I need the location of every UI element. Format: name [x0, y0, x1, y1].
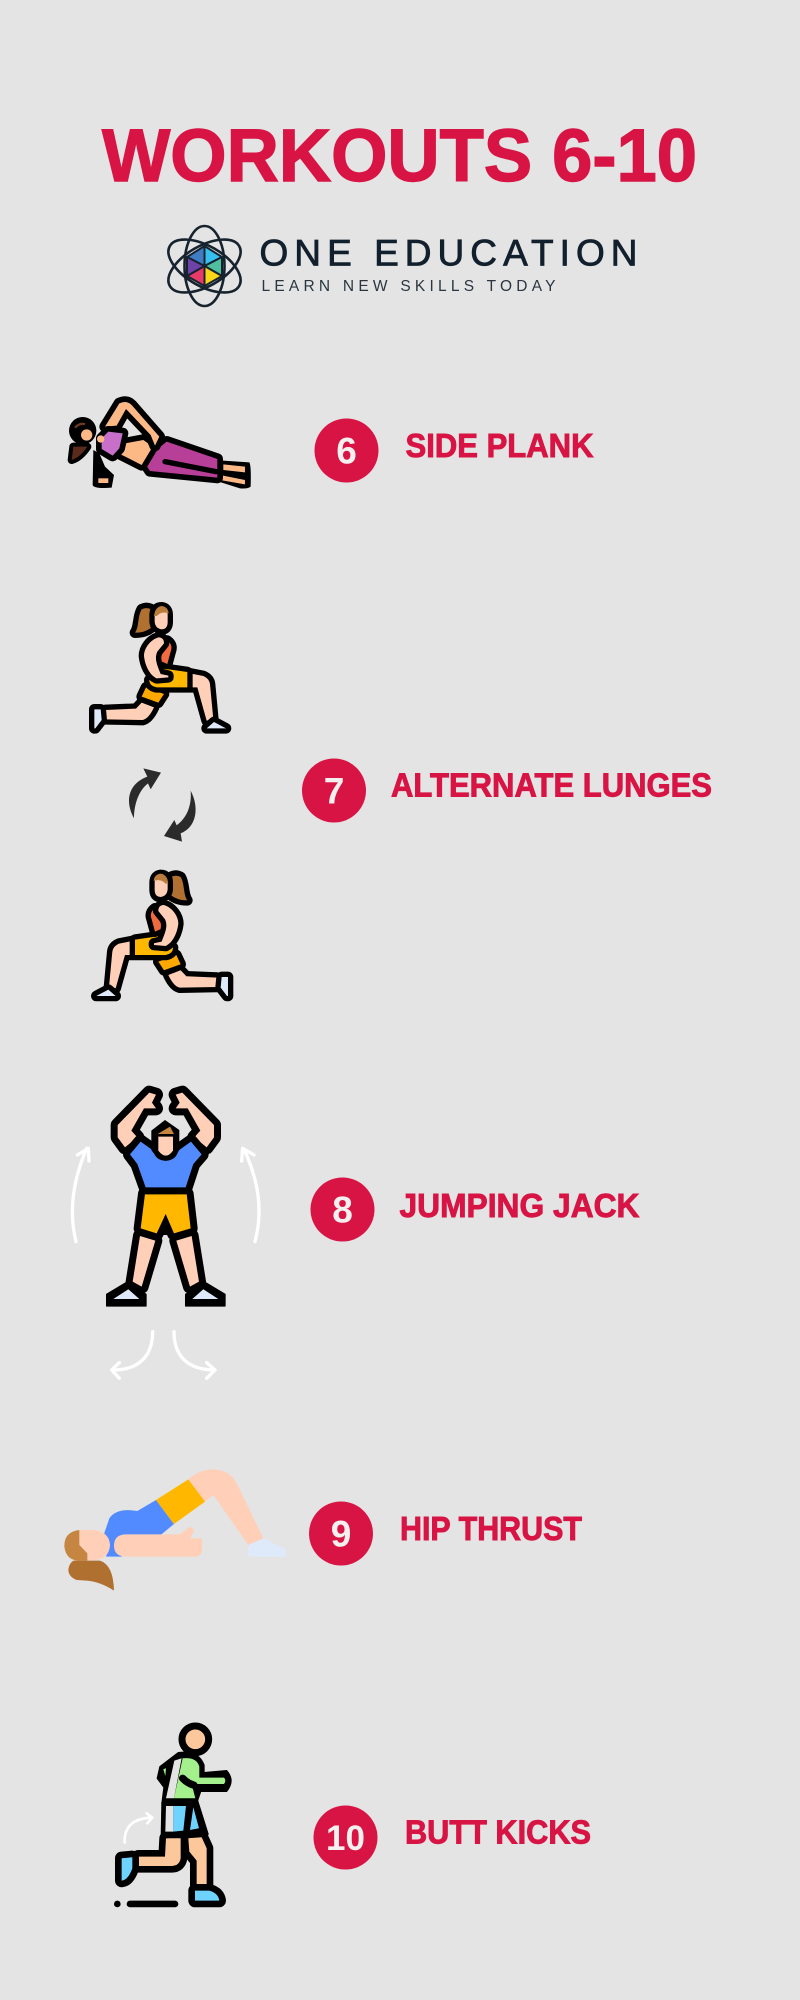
step 9 badge [309, 1502, 373, 1566]
label: alternate lunges: ALTERNATE LUNGES [391, 766, 712, 804]
icon: jumping jack figure [107, 1093, 225, 1306]
logo wordmark: ONE EDUCATION [260, 232, 638, 274]
title: WORKOUTS 6-10 [102, 114, 697, 197]
feet hull [217, 460, 251, 488]
step 6 badge [314, 418, 378, 482]
kick arrow [125, 1813, 152, 1843]
step 7 badge [302, 758, 366, 822]
logo: One Education [160, 226, 638, 306]
front shoe [195, 1891, 219, 1901]
label: butt kicks: BUTT KICKS [405, 1814, 591, 1850]
crotch [160, 1214, 171, 1235]
shoes [107, 1282, 146, 1306]
step 10 badge: 10 [326, 1819, 365, 1858]
step 10 badge [314, 1806, 378, 1870]
label: hip thrust: HIP THRUST [400, 1510, 582, 1547]
icon: lunge facing right [96, 874, 228, 996]
icon: side plank [69, 402, 251, 488]
ponytail [72, 447, 87, 460]
icon: lunge facing left [94, 606, 226, 728]
back leg [138, 1838, 181, 1866]
arrows: jumping jack movement [72, 1148, 259, 1378]
step 9 badge: 9 [331, 1514, 351, 1554]
icon: hip thrust [64, 1469, 286, 1591]
ground marks [114, 1901, 121, 1907]
shorts [165, 1806, 173, 1832]
head [151, 1120, 179, 1161]
head [182, 1726, 209, 1753]
icon: rotation arrows [129, 768, 196, 842]
step 8 badge [310, 1178, 374, 1242]
shorts [141, 1194, 191, 1233]
logo tagline: LEARN NEW SKILLS TODAY [262, 278, 556, 295]
step 6 badge: 6 [336, 430, 357, 472]
legs [133, 1236, 155, 1287]
support arm [93, 450, 114, 488]
shirt [174, 1758, 225, 1798]
label: jumping jack: JUMPING JACK [400, 1187, 640, 1224]
arms [118, 1093, 156, 1147]
front leg [188, 1837, 207, 1885]
logo icon: atom with coloured hexagon [160, 226, 249, 306]
back shoe [122, 1857, 132, 1881]
body shapes [102, 402, 217, 478]
head [69, 417, 96, 444]
icon: butt kicks runner [114, 1726, 231, 1907]
shirt [130, 1142, 202, 1187]
label: side plank: SIDE PLANK [406, 427, 594, 464]
step 7 badge: 7 [324, 770, 344, 812]
step 8 badge: 8 [332, 1190, 353, 1230]
